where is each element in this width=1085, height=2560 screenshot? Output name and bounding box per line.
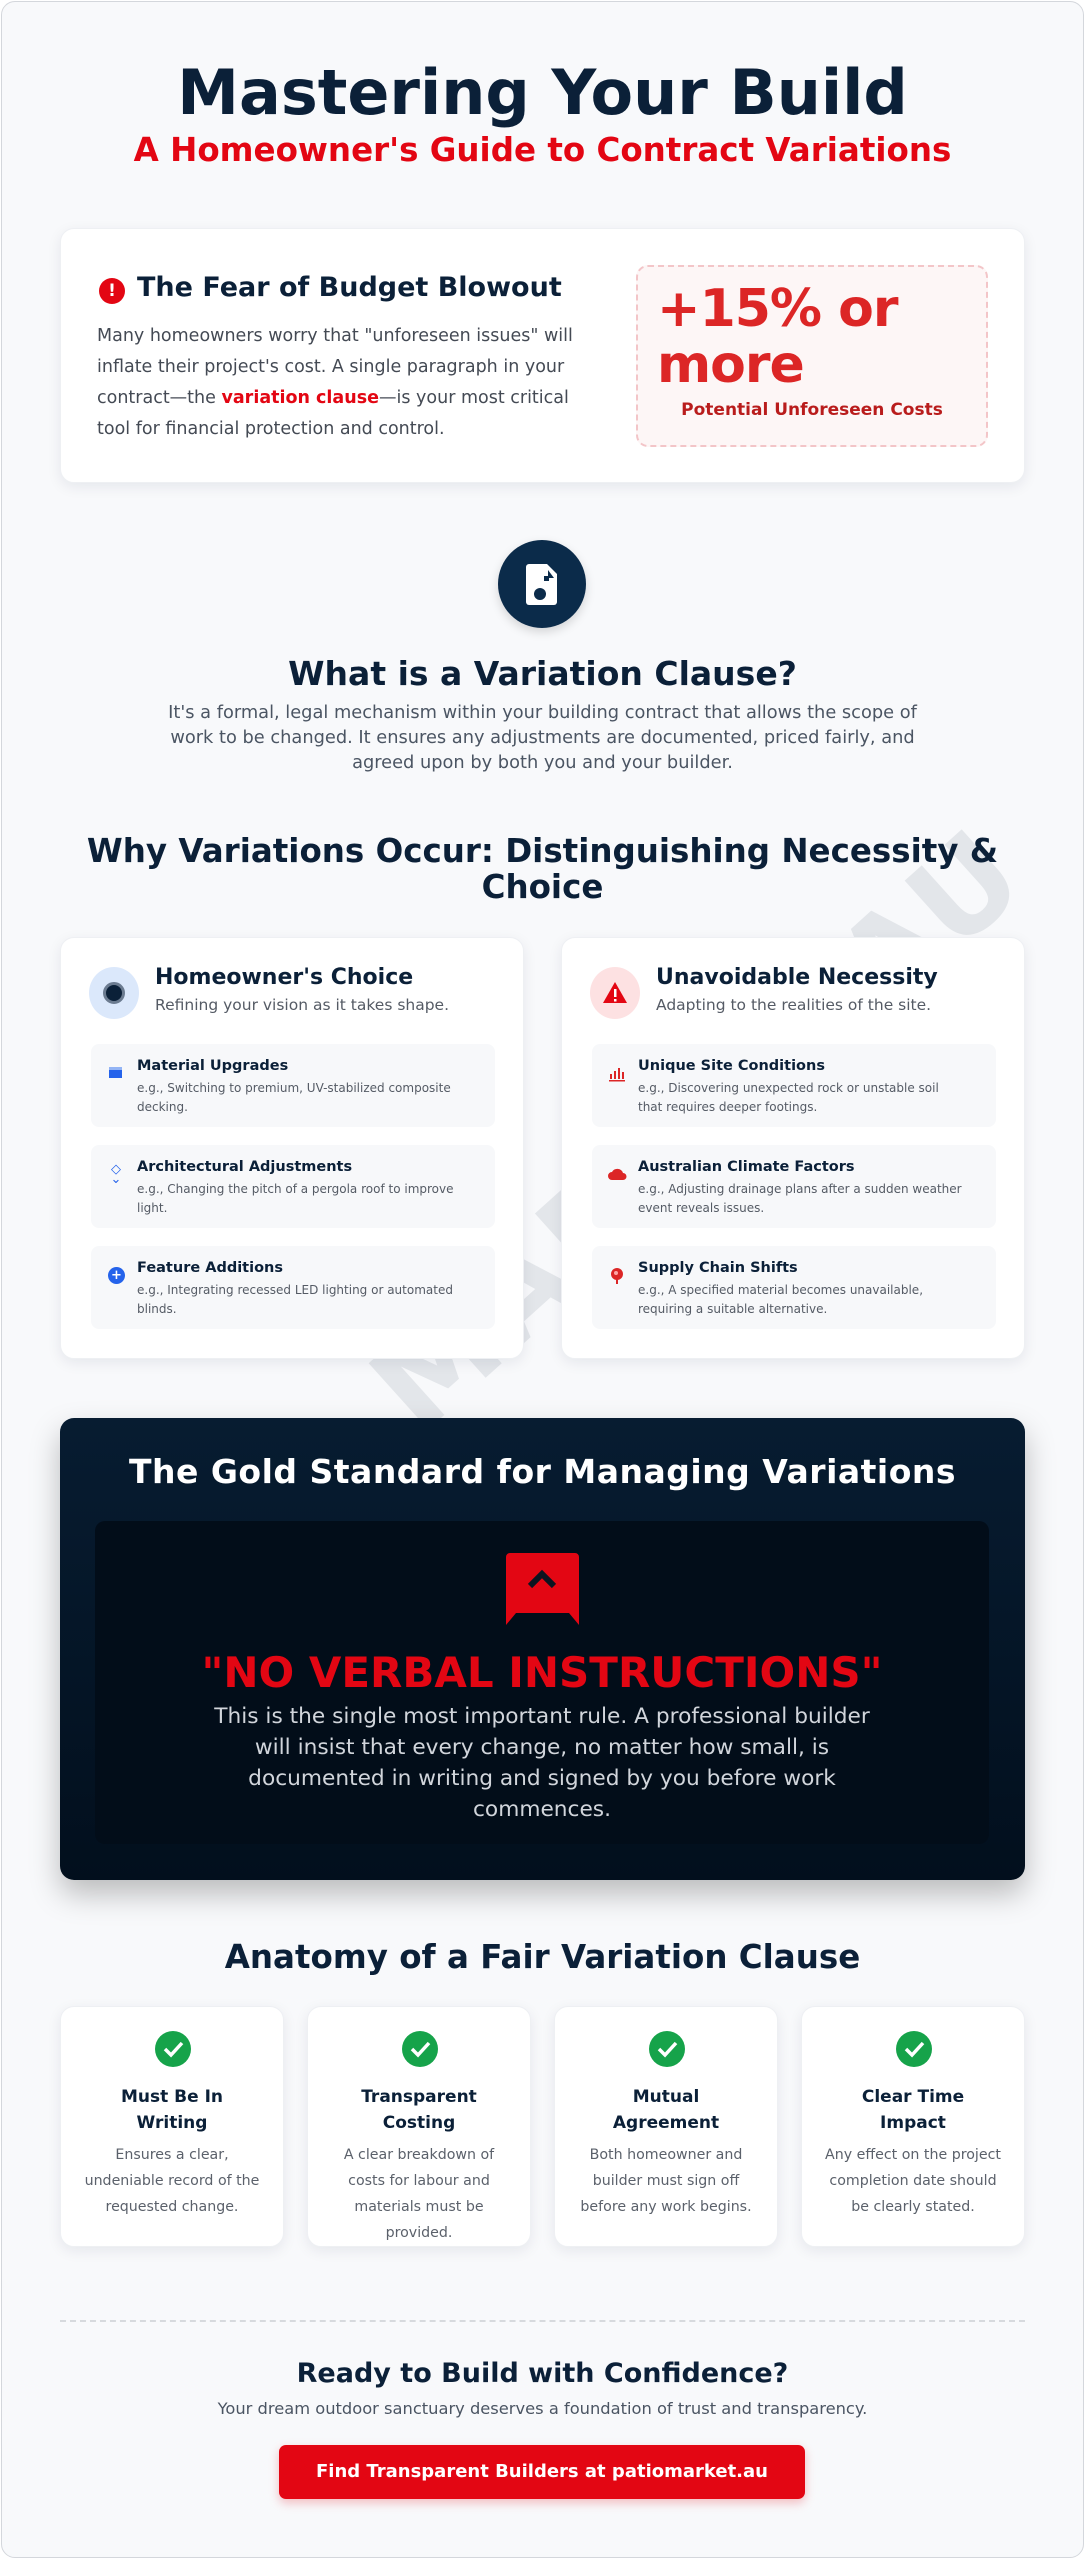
title: Mastering Your Build xyxy=(177,56,908,129)
watermark: MARKET.AU xyxy=(344,801,1052,1458)
panel: gold standard xyxy=(60,1418,1025,1880)
item: supply chain: requiring a suitable alternative. xyxy=(638,1302,827,1316)
text: rule: will insist that every change, no matter how small, is xyxy=(255,1735,829,1760)
card: transparent costing: Transparent Costing xyxy=(361,2087,477,2133)
icon: alert: ! xyxy=(108,281,116,301)
heading: ready to build: Ready to Build with Confidence? xyxy=(297,2358,788,2389)
text: rule: This is the single most important rule. A professional builder xyxy=(214,1704,870,1729)
item: architectural adjustments: Architectural Adjustments xyxy=(137,1159,352,1175)
card: clear time impact: completion date should xyxy=(829,2173,997,2189)
text: rule: commences. xyxy=(473,1797,611,1822)
card: in writing: Ensures a clear, xyxy=(115,2147,229,2163)
item: site conditions: that requires deeper footings. xyxy=(638,1100,817,1114)
item: climate factors: e.g., Adjusting drainage plans after a sudden weather xyxy=(638,1182,962,1196)
card: clear time impact xyxy=(801,2006,1025,2247)
item: material upgrades: decking. xyxy=(137,1100,188,1114)
icon: warning xyxy=(590,967,640,1019)
stat label: Potential Unforeseen Costs xyxy=(681,400,943,420)
item: climate factors: Australian Climate Factors xyxy=(638,1159,855,1175)
icon: choice xyxy=(89,967,139,1019)
button: cta xyxy=(279,2445,805,2499)
panel: unavoidable necessity xyxy=(561,937,1025,1359)
item: architectural adjustments: ⌄ xyxy=(111,1172,121,1187)
item: supply chain: Supply Chain Shifts xyxy=(638,1260,798,1276)
callout: no verbal instructions: "NO VERBAL INSTRUCTIONS" xyxy=(201,1648,882,1697)
card: transparent costing: costs for labour and xyxy=(348,2173,490,2189)
text: rule xyxy=(214,1704,870,1822)
heading: gold standard: The Gold Standard for Managing Variations xyxy=(129,1452,956,1491)
card: clear time impact: Any effect on the project xyxy=(825,2147,1001,2163)
text: definition: work to be changed. It ensures any adjustments are documented, priced fairly, and xyxy=(170,727,915,748)
text: cta subline: Your dream outdoor sanctuary deserves a foundation of trust and transparency. xyxy=(218,2399,867,2418)
item: supply chain: e.g., A specified material becomes unavailable, xyxy=(638,1283,923,1297)
inner callout xyxy=(95,1521,989,1844)
text: definition xyxy=(168,702,918,773)
card: in writing: requested change. xyxy=(106,2199,238,2215)
panel: homeowner's choice xyxy=(60,937,524,1359)
heading: why variations occur: Why Variations Occur: Distinguishing Necessity & Choice xyxy=(87,832,998,906)
item: architectural adjustments: light. xyxy=(137,1201,167,1215)
item: feature additions xyxy=(91,1246,495,1329)
item: supply chain xyxy=(592,1246,996,1329)
heading: Unavoidable Necessity xyxy=(656,965,938,990)
icon: document xyxy=(498,540,586,628)
subheading: Adapting to the realities of the site. xyxy=(656,996,931,1014)
item: feature additions: e.g., Integrating recessed LED lighting or automated xyxy=(137,1283,453,1297)
stat box xyxy=(636,265,988,447)
item: architectural adjustments: ◇ xyxy=(111,1162,121,1177)
item: feature additions: blinds. xyxy=(137,1302,177,1316)
card: transparent costing: provided. xyxy=(386,2225,452,2241)
card: clear time impact: be clearly stated. xyxy=(851,2199,975,2215)
text: definition: agreed upon by both you and your builder. xyxy=(352,752,733,773)
panel: budget blowout xyxy=(60,228,1025,483)
item: material upgrades: e.g., Switching to premium, UV-stabilized composite xyxy=(137,1081,451,1095)
text: budget paragraph: Many homeowners worry that "unforeseen issues" will inflate their project's cost. A single paragraph in your contract—the variation clause—is your most critical tool for financial protection and control. xyxy=(97,326,573,439)
subheading: Refining your vision as it takes shape. xyxy=(155,996,449,1014)
text: definition: It's a formal, legal mechanism within your building contract that allows the scope of xyxy=(168,702,917,723)
card: mutual agreement: before any work begins. xyxy=(580,2199,752,2215)
card: transparent costing: materials must be xyxy=(354,2199,484,2215)
card: transparent costing xyxy=(307,2006,531,2247)
heading: fear of budget blowout: The Fear of Budget Blowout xyxy=(137,272,562,303)
button: cta: Find Transparent Builders at patiomarket.au xyxy=(316,2461,768,2482)
item: feature additions: Feature Additions xyxy=(137,1260,283,1276)
item: site conditions: e.g., Discovering unexpected rock or unstable soil xyxy=(638,1081,939,1095)
card: in writing xyxy=(60,2006,284,2247)
card: in writing: undeniable record of the xyxy=(85,2173,259,2189)
text: rule: documented in writing and signed by you before work xyxy=(248,1766,836,1791)
heading: Homeowner's Choice xyxy=(155,965,413,990)
card: mutual agreement: Mutual Agreement xyxy=(613,2087,719,2133)
heading: anatomy: Anatomy of a Fair Variation Clause xyxy=(225,1938,860,1976)
card: mutual agreement xyxy=(554,2006,778,2247)
icon: red flag xyxy=(506,1553,579,1625)
card: mutual agreement: Both homeowner and xyxy=(590,2147,742,2163)
card: in writing: Must Be In Writing xyxy=(121,2087,223,2133)
subtitle: A Homeowner's Guide to Contract Variations xyxy=(134,131,951,169)
card: mutual agreement: builder must sign off xyxy=(593,2173,739,2189)
item: site conditions xyxy=(592,1044,996,1127)
item: architectural adjustments xyxy=(91,1145,495,1228)
card: transparent costing: A clear breakdown of xyxy=(344,2147,494,2163)
icon: alert xyxy=(99,278,125,304)
item: material upgrades xyxy=(91,1044,495,1127)
card: clear time impact: Clear Time Impact xyxy=(862,2087,964,2133)
item: climate factors xyxy=(592,1145,996,1228)
item: material upgrades: Material Upgrades xyxy=(137,1058,288,1074)
stat number: +15% or more xyxy=(657,279,898,395)
item: climate factors: event reveals issues. xyxy=(638,1201,764,1215)
item: site conditions: Unique Site Conditions xyxy=(638,1058,825,1074)
heading: what is a variation clause: What is a Variation Clause? xyxy=(288,654,797,693)
item: architectural adjustments: e.g., Changing the pitch of a pergola roof to improve xyxy=(137,1182,454,1196)
item: feature additions: + xyxy=(111,1268,122,1283)
